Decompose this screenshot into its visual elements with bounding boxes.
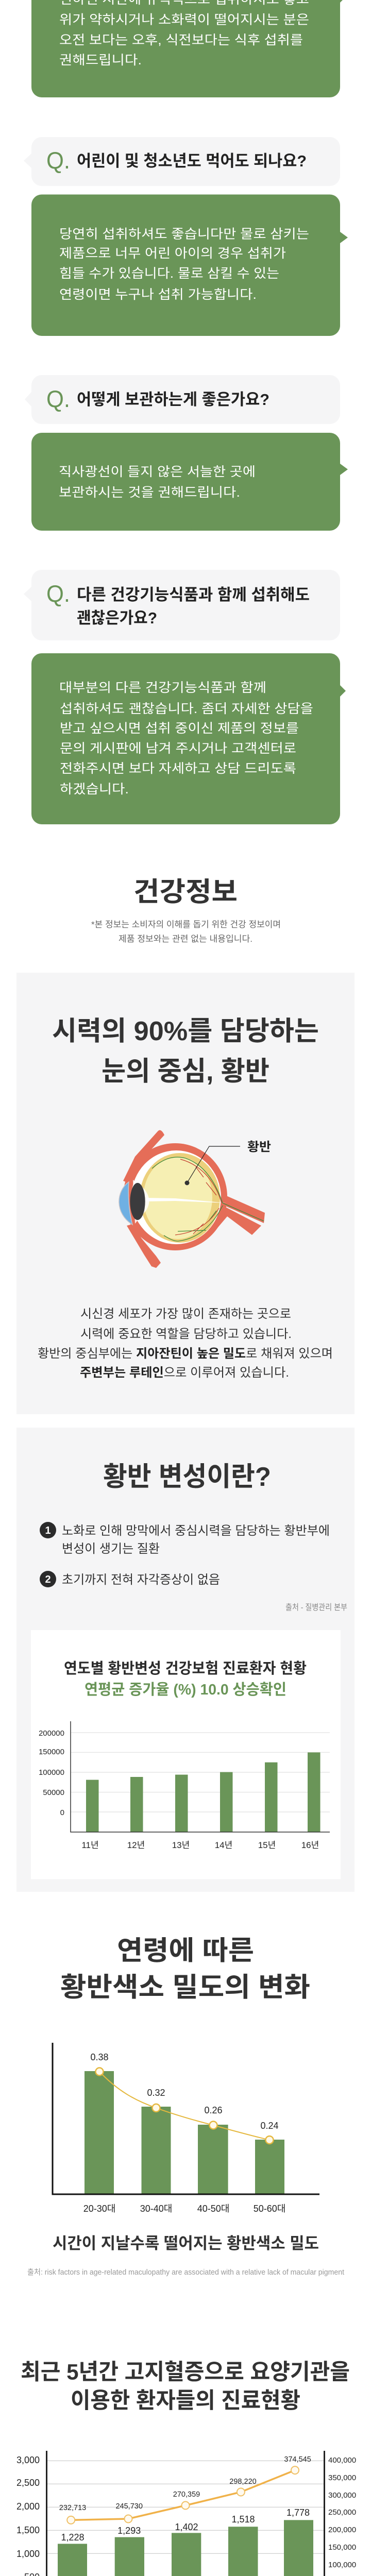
- combo chart: patients and cost: 232,713: [59, 2504, 86, 2512]
- callout: macula label: [184, 1140, 271, 1185]
- FAQ question: children: Q.: [46, 147, 70, 174]
- combo chart: pigment density: 0.24: [260, 2121, 279, 2131]
- combo chart: patients and cost: [12, 2451, 359, 2576]
- combo chart: pigment density: 0.26: [204, 2105, 223, 2115]
- combo chart: patients and cost: 1,518: [231, 2514, 255, 2524]
- heading: 5-year hyperlipidemia: [21, 2360, 350, 2413]
- FAQ question: storage: Q.: [46, 385, 70, 412]
- panel: macular degeneration: [16, 1428, 355, 1892]
- FAQ answer: other supplements: 전화주시면 보다 자세하고 상담 드리도록: [60, 761, 296, 776]
- FAQ question: other supplements: Q.: [46, 580, 70, 607]
- FAQ answer: intake timing: 권해드립니다.: [59, 53, 142, 67]
- chart title: [64, 1660, 307, 1698]
- combo chart: patients and cost: 374,545: [284, 2455, 311, 2464]
- combo chart: patients and cost: 250,000: [328, 2508, 356, 2517]
- combo chart: pigment density: 50-60대: [254, 2204, 285, 2214]
- combo chart: pigment density: 0.32: [147, 2088, 165, 2098]
- FAQ question: storage: 어떻게 보관하는게 좋은가요?: [77, 391, 269, 409]
- item 1: 노화로 인해 망막에서 중심시력을 담당하는 황반부에: [62, 1524, 330, 1538]
- text block: macula description: 주변부는 루테인으로 이루어져 있습니다.: [80, 1366, 289, 1380]
- card: patient chart: [31, 1630, 341, 1879]
- FAQ answer: other supplements: 대부분의 다른 건강기능식품과 함께: [59, 681, 266, 695]
- bar chart: patients by year: 11년: [81, 1840, 99, 1850]
- combo chart: patients and cost: 245,730: [115, 2502, 143, 2511]
- combo chart: patients and cost: 3,000: [16, 2455, 40, 2465]
- FAQ answer: children: 힘들 수가 있습니다. 물로 삼킬 수 있는: [59, 266, 279, 281]
- combo chart: pigment density: [53, 2043, 319, 2214]
- text block: macula description: 시력에 중요한 역할을 담당하고 있습니다.: [80, 1327, 292, 1341]
- bar chart: patients by year: 0: [60, 1808, 64, 1817]
- FAQ question: other supplements: 괜찮은가요?: [77, 609, 157, 627]
- heading: pigment density by age: 황반색소 밀도의 변화: [60, 1973, 310, 2003]
- combo chart: patients and cost: 100,000: [328, 2561, 356, 2569]
- bar chart: patients by year: 15년: [258, 1840, 276, 1850]
- source note: 출처 - 질병관리 본부: [285, 1603, 347, 1612]
- FAQ answer: children: 제품으로 너무 어린 아이의 경우 섭취가: [59, 246, 286, 261]
- combo chart: patients and cost: 2,000: [16, 2501, 40, 2512]
- item 2: 2: [45, 1574, 51, 1585]
- FAQ answer: intake timing: 위가 약하시거나 소화력이 떨어지시는 분은: [59, 12, 309, 27]
- combo chart: pigment density: 0.38: [90, 2052, 109, 2062]
- chart caption: 시간이 지날수록 떨어지는 황반색소 밀도: [53, 2234, 319, 2252]
- combo chart: patients and cost: 300,000: [328, 2491, 356, 2500]
- callout: macula label: 황반: [247, 1140, 271, 1154]
- FAQ question: other supplements: 다른 건강기능식품과 함께 섭취해도: [77, 586, 310, 604]
- heading: macular degeneration: 황반 변성이란?: [103, 1462, 271, 1492]
- combo chart: patients and cost: 2,500: [16, 2478, 40, 2488]
- FAQ question: other supplements: [24, 570, 340, 640]
- heading: 5-year hyperlipidemia: 최근 5년간 고지혈증으로 요양기관을: [21, 2360, 350, 2384]
- FAQ answer: storage: [31, 433, 348, 531]
- FAQ answer: children: 당연히 섭취하셔도 좋습니다만 물로 삼키는: [59, 227, 309, 241]
- bar chart: patients by year: 100000: [39, 1768, 64, 1777]
- FAQ answer: other supplements: 하겠습니다.: [60, 782, 129, 796]
- text block: macula description: 황반의 중심부에는 지아잔틴이 높은 밀도로 채워져 있으며: [38, 1347, 333, 1361]
- FAQ question: children: [24, 137, 340, 186]
- combo chart: patients and cost: 1,000: [16, 2549, 40, 2559]
- heading: macula: 눈의 중심, 황반: [102, 1057, 269, 1087]
- FAQ answer: storage: 직사광선이 들지 않은 서늘한 곳에: [59, 465, 256, 479]
- heading: pigment density by age: 연령에 따른: [117, 1936, 254, 1966]
- icon: eye cross-section: [119, 1130, 265, 1268]
- FAQ answer: children: 연령이면 누구나 섭취 가능합니다.: [59, 287, 257, 302]
- bar chart: patients by year: 150000: [39, 1748, 64, 1756]
- heading: macula: [52, 1016, 319, 1087]
- FAQ answer: intake timing: 오전 보다는 오후, 식전보다는 식후 섭취를: [59, 33, 303, 47]
- panel: macula: [16, 973, 355, 1414]
- FAQ question: storage: [25, 375, 340, 424]
- FAQ answer: other supplements: 문의 게시판에 남겨 주시거나 고객센터로: [60, 741, 296, 756]
- FAQ answer: other supplements: 섭취하셔도 괜찮습니다. 좀더 자세한 상담을: [60, 702, 313, 716]
- bar chart: patients by year: 16년: [301, 1840, 319, 1850]
- combo chart: patients and cost: 1,500: [16, 2525, 40, 2535]
- chart title: 연평균 증가율 (%) 10.0 상승확인: [85, 1681, 286, 1698]
- combo chart: patients and cost: 400,000: [328, 2456, 356, 2465]
- heading: 5-year hyperlipidemia: 이용한 환자들의 진료현황: [71, 2388, 300, 2413]
- combo chart: patients and cost: 1,778: [286, 2507, 310, 2518]
- combo chart: patients and cost: 270,359: [173, 2490, 200, 2499]
- FAQ answer: storage: 보관하시는 것을 권해드립니다.: [59, 485, 240, 500]
- bar chart: patients by year: 200000: [39, 1729, 64, 1738]
- item 1: [40, 1522, 330, 1556]
- bar chart: patients by year: 14년: [215, 1840, 232, 1850]
- FAQ answer: intake timing: [31, 0, 343, 97]
- heading: health info: [91, 877, 281, 944]
- combo chart: pigment density: 30-40대: [140, 2204, 172, 2214]
- FAQ answer: children: [31, 195, 348, 336]
- text block: macula description: [38, 1307, 333, 1380]
- source note: 출처: risk factors in age-related maculopathy are associated with a relative lack of macular pigment: [27, 2268, 345, 2277]
- combo chart: patients and cost: 350,000: [328, 2473, 356, 2482]
- FAQ question: children: 어린이 및 청소년도 먹어도 되나요?: [77, 152, 307, 170]
- combo chart: patients and cost: 1,402: [175, 2522, 198, 2532]
- heading: health info: *본 정보는 소비자의 이해를 돕기 위한 건강 정보이며: [91, 920, 281, 929]
- combo chart: pigment density: 20-30대: [83, 2204, 115, 2214]
- item 2: 초기까지 전혀 자각증상이 없음: [62, 1573, 220, 1587]
- heading: health info: 제품 정보와는 관련 없는 내용입니다.: [119, 934, 252, 944]
- bar chart: patients by year: [39, 1721, 330, 1850]
- heading: pigment density by age: [60, 1936, 310, 2003]
- combo chart: patients and cost: 1,228: [61, 2532, 85, 2543]
- FAQ answer: other supplements: [31, 653, 346, 824]
- combo chart: pigment density: 40-50대: [197, 2204, 229, 2214]
- heading: macula: 시력의 90%를 담당하는: [52, 1016, 319, 1046]
- chart title: 연도별 황반변성 건강보험 진료환자 현황: [64, 1660, 307, 1677]
- item 1: 변성이 생기는 질환: [62, 1542, 160, 1556]
- combo chart: patients and cost: 298,220: [229, 2478, 257, 2486]
- combo chart: patients and cost: 200,000: [328, 2526, 356, 2534]
- FAQ answer: other supplements: 받고 싶으시면 섭취 중이신 제품의 정보를: [60, 721, 299, 736]
- item 1: 1: [45, 1525, 51, 1536]
- heading: health info: 건강정보: [133, 877, 238, 907]
- text block: macula description: 시신경 세포가 가장 많이 존재하는 곳으로: [80, 1307, 291, 1321]
- bar chart: patients by year: 50000: [43, 1788, 64, 1797]
- bar chart: patients by year: 12년: [127, 1840, 145, 1850]
- bar chart: patients by year: 13년: [172, 1840, 190, 1850]
- combo chart: patients and cost: 150,000: [328, 2543, 356, 2552]
- combo chart: patients and cost: 1,293: [117, 2526, 141, 2536]
